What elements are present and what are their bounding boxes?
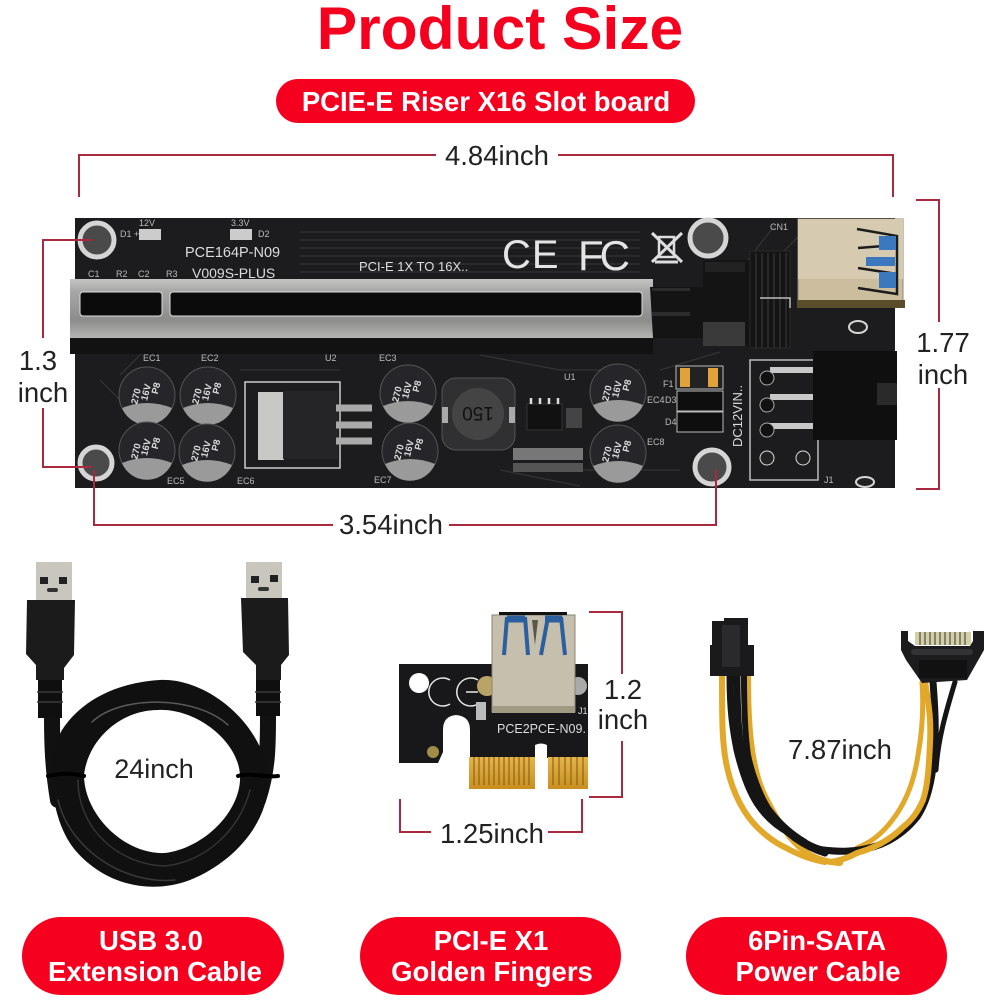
dimension: 1.77 inch height bbox=[916, 200, 970, 489]
board labels: EC3 bbox=[379, 353, 397, 363]
dimension: hole spacing 3.54inch bbox=[94, 470, 716, 540]
left USB plug bbox=[26, 562, 75, 718]
board labels: EC1 bbox=[143, 353, 161, 363]
capacitors: P8 bbox=[621, 439, 634, 453]
board labels: U1 bbox=[564, 372, 576, 382]
SATA connector bbox=[901, 631, 984, 683]
gold fingers bbox=[469, 757, 588, 789]
capacitors bbox=[119, 364, 646, 483]
board labels: R3 bbox=[166, 269, 178, 279]
dimension: 1.3 inch height bbox=[18, 240, 92, 467]
board labels: EC8 bbox=[647, 437, 665, 447]
label pill: PCI-E X1 Golden Fingers: PCI-E X1 bbox=[434, 925, 548, 956]
dimension: card width 1.25inch: 1.25inch bbox=[440, 818, 544, 849]
6-pin power socket bbox=[750, 351, 897, 480]
USB 3.0 female port bbox=[797, 219, 905, 308]
logos: CE, FC, WEEE: FC bbox=[578, 232, 629, 279]
heading pill: PCIE-E Riser X16 Slot board: PCIE-E Riser X16 Slot board bbox=[302, 86, 670, 117]
board labels: F1 bbox=[663, 379, 674, 389]
inductor 150 bbox=[442, 378, 515, 450]
dimension: cable length 24inch: 24inch bbox=[114, 754, 194, 784]
mounting rings and label text bbox=[476, 676, 588, 720]
PCI-E X1 golden fingers card bbox=[399, 612, 588, 789]
capacitors: 270 bbox=[392, 443, 407, 461]
capacitors: 270 bbox=[129, 387, 144, 405]
U1 chip and small parts bbox=[513, 398, 583, 472]
label pill: PCI-E X1 Golden Fingers bbox=[360, 917, 621, 995]
dimension: 1.3 inch height: 1.3 bbox=[19, 345, 57, 376]
mounting rings and label text: J1 bbox=[578, 706, 588, 716]
board labels: EC7 bbox=[374, 475, 392, 485]
label pill: 6Pin-SATA Power Cable: 6Pin-SATA bbox=[748, 925, 886, 956]
board labels: D2 bbox=[258, 229, 270, 239]
label pill: 6Pin-SATA Power Cable: Power Cable bbox=[735, 956, 901, 987]
dimension: hole spacing 3.54inch: 3.54inch bbox=[339, 509, 443, 540]
board labels: V009S-PLUS bbox=[192, 265, 275, 281]
capacitors: 270 bbox=[190, 387, 205, 405]
wires bbox=[722, 676, 955, 863]
capacitors: P8 bbox=[210, 438, 223, 452]
x16 slot with silver bracket bbox=[70, 279, 653, 354]
dimension: card height 1.2 inch bbox=[589, 612, 648, 797]
board labels: EC5 bbox=[167, 476, 185, 486]
heading pill: PCIE-E Riser X16 Slot board bbox=[276, 79, 695, 123]
board labels: 12V bbox=[139, 218, 155, 228]
board labels: DC12VIN.. bbox=[730, 385, 745, 447]
USB port bbox=[492, 612, 575, 713]
board labels: EC2 bbox=[201, 353, 219, 363]
logos: CE, FC, WEEE: CE bbox=[502, 233, 560, 277]
board labels: EC6 bbox=[237, 476, 255, 486]
fuse and diodes bbox=[676, 366, 723, 432]
black latch clip bbox=[650, 251, 790, 348]
board labels: U2 bbox=[325, 353, 337, 363]
USB 3.0 extension cable bbox=[26, 562, 289, 887]
board labels: CN1 bbox=[770, 222, 788, 232]
capacitors: 16V bbox=[139, 437, 154, 457]
board labels: PCI-E 1X TO 16X.. bbox=[359, 259, 468, 274]
label pill: PCI-E X1 Golden Fingers: Golden Fingers bbox=[391, 956, 593, 987]
capacitors: 16V bbox=[200, 382, 215, 402]
capacitors: 16V bbox=[610, 440, 625, 460]
capacitors: 270 bbox=[600, 384, 615, 402]
board labels: C2 bbox=[138, 269, 150, 279]
dimension: cable length 7.87inch: 7.87inch bbox=[788, 734, 892, 765]
dimension: card width 1.25inch bbox=[400, 799, 582, 849]
capacitors: P8 bbox=[413, 437, 426, 451]
6Pin-SATA power cable bbox=[710, 618, 984, 863]
board labels: J1 bbox=[824, 475, 834, 485]
capacitors: P8 bbox=[411, 379, 424, 393]
board labels: C1 bbox=[88, 269, 100, 279]
capacitors: P8 bbox=[150, 436, 163, 450]
riser board bbox=[70, 218, 905, 488]
logos: CE, FC, WEEE bbox=[502, 232, 682, 279]
dimension: board width 4.84inch: 4.84inch bbox=[445, 140, 549, 171]
PCB bbox=[75, 218, 895, 488]
capacitors: 16V bbox=[400, 380, 415, 400]
capacitors: 270 bbox=[390, 385, 405, 403]
board labels: D4 bbox=[665, 417, 677, 427]
board labels: EC4 bbox=[647, 395, 665, 405]
coiled cable bbox=[48, 680, 278, 887]
voltage regulator bbox=[245, 382, 372, 468]
6-pin connector bbox=[710, 618, 754, 676]
dimension: card height 1.2 inch: 1.2 bbox=[604, 674, 642, 705]
dimension: 1.77 inch height: 1.77 bbox=[916, 327, 970, 358]
board labels: PCE164P-N09 bbox=[185, 245, 280, 261]
right USB plug bbox=[241, 562, 289, 716]
board label: PCE2PCE-N09. bbox=[497, 722, 586, 736]
mounting holes bbox=[80, 220, 874, 487]
dimension: card height 1.2 inch: inch bbox=[598, 704, 648, 735]
capacitors: 16V bbox=[139, 382, 154, 402]
capacitors: 16V bbox=[199, 439, 214, 459]
board labels: R2 bbox=[116, 269, 128, 279]
board labels bbox=[88, 218, 834, 486]
capacitors: 16V bbox=[610, 379, 625, 399]
capacitors: 270 bbox=[600, 445, 615, 463]
capacitors: P8 bbox=[211, 381, 224, 395]
dimension: 1.3 inch height: inch bbox=[18, 377, 68, 408]
label pill: USB 3.0 Extension Cable: Extension Cable bbox=[48, 956, 262, 987]
inductor 150: 150 bbox=[462, 402, 494, 423]
label pill: 6Pin-SATA Power Cable bbox=[686, 917, 947, 995]
label pill: USB 3.0 Extension Cable bbox=[22, 917, 284, 995]
capacitors: P8 bbox=[150, 381, 163, 395]
dimension: board width 4.84inch bbox=[79, 140, 893, 197]
dimension: 1.77 inch height: inch bbox=[918, 359, 968, 390]
board labels: D3 bbox=[665, 395, 677, 405]
capacitors: P8 bbox=[621, 378, 634, 392]
label pill: USB 3.0 Extension Cable: USB 3.0 bbox=[99, 925, 203, 956]
capacitors: 270 bbox=[189, 444, 204, 462]
board labels: 3.3V bbox=[231, 218, 250, 228]
adapter PCB bbox=[399, 664, 588, 763]
board labels: D1 + bbox=[120, 229, 139, 239]
capacitors: 16V bbox=[402, 438, 417, 458]
capacitors: 270 bbox=[129, 442, 144, 460]
